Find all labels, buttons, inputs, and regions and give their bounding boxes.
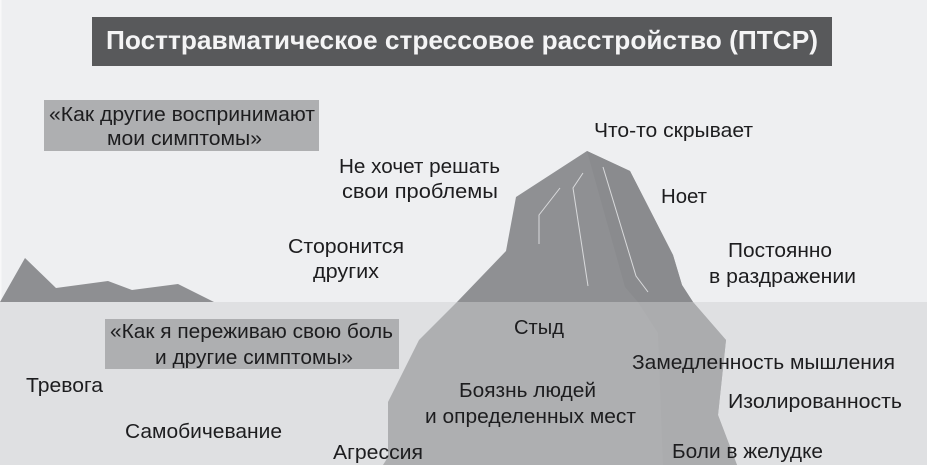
label box: how I experience my pain: «Как я переживаю свою боль <box>110 321 393 343</box>
text: shame: Стыд <box>514 317 564 339</box>
text: aggression: Агрессия <box>333 442 423 464</box>
label box: how I experience my pain <box>105 319 399 369</box>
text: avoids others: Сторонится <box>288 236 404 258</box>
text: self-flagellation: Самобичевание <box>125 421 282 443</box>
text: constantly irritated <box>709 240 856 288</box>
text: hides something: Что-то скрывает <box>594 120 753 142</box>
text: isolation: Изолированность <box>728 391 902 413</box>
text: slowed thinking: Замедленность мышления <box>632 352 895 374</box>
iceberg above water <box>457 151 693 302</box>
text: does not want to solve problems <box>339 156 500 203</box>
text: does not want to solve problems: свои проблемы <box>342 181 498 203</box>
label box: how I experience my pain: и другие симптомы» <box>155 347 353 369</box>
water area <box>0 302 927 465</box>
iceberg below water <box>383 302 737 465</box>
title <box>92 17 832 66</box>
title: Посттравматическое стрессовое расстройство (ПТСР) <box>106 25 818 55</box>
text: does not want to solve problems: Не хочет решать <box>339 156 500 178</box>
text: whines: Ноет <box>661 186 707 208</box>
label box: how others see my symptoms: «Как другие воспринимают <box>49 104 315 126</box>
text: fear of people and places <box>425 380 636 428</box>
ice cracks <box>539 167 648 292</box>
text: fear of people and places: и определенных мест <box>425 406 636 428</box>
text: stomach pain: Боли в желудке <box>672 441 823 463</box>
text: constantly irritated: в раздражении <box>709 266 856 288</box>
label box: how others see my symptoms: мои симптомы» <box>107 128 262 150</box>
small distant iceberg <box>0 258 214 302</box>
text: avoids others <box>288 236 404 283</box>
text: avoids others: других <box>313 261 379 283</box>
text: anxiety: Тревога <box>26 375 104 397</box>
label box: how others see my symptoms <box>44 100 319 151</box>
text: constantly irritated: Постоянно <box>728 240 832 262</box>
text: fear of people and places: Боязнь людей <box>459 380 596 402</box>
